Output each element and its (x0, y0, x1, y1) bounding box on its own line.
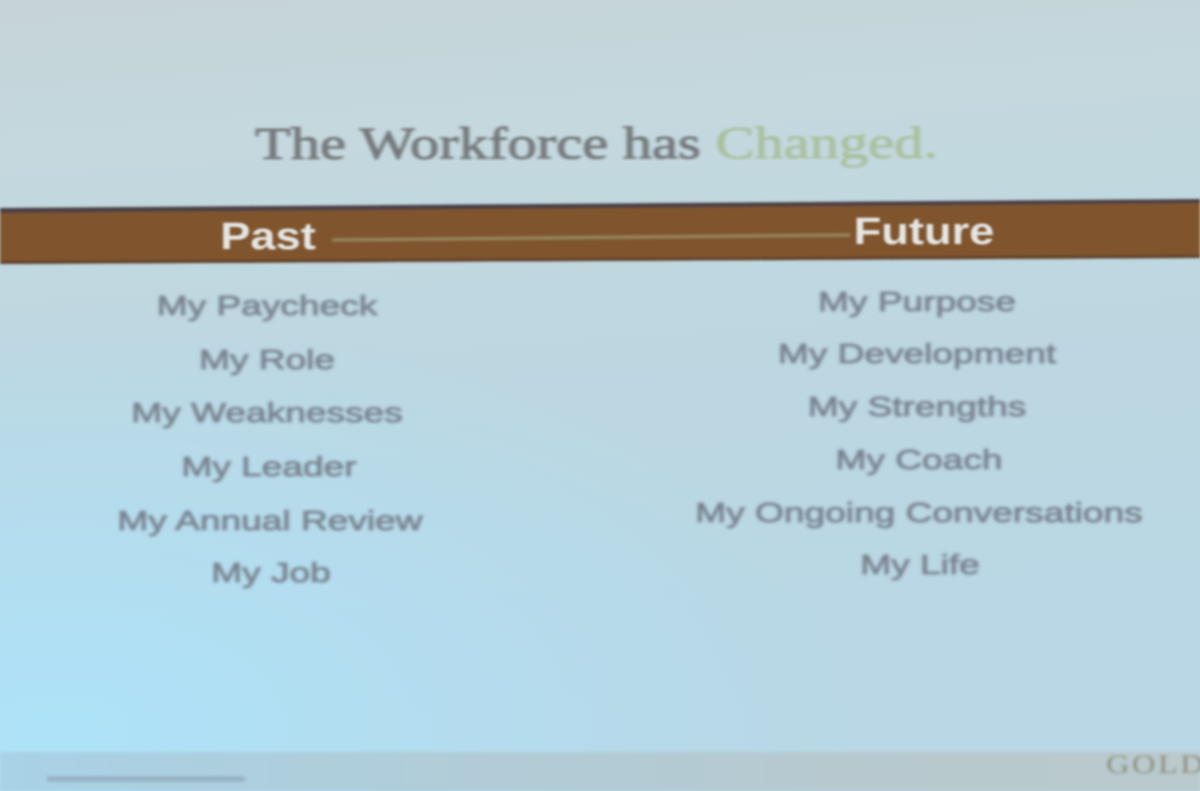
past column list: My Leader (181, 451, 357, 482)
future column list: My Development (778, 338, 1056, 369)
past column list: My Job (211, 557, 331, 588)
title: The Workforce has Changed. (255, 118, 938, 169)
future column list: My Purpose (818, 286, 1016, 317)
future column list: My Coach (835, 444, 1003, 475)
footer bar (0, 752, 1200, 791)
past column list: My Annual Review (117, 505, 423, 536)
future column list: My Life (860, 549, 980, 580)
past column list: My Weaknesses (131, 397, 403, 428)
footer small text (47, 777, 245, 781)
heading: Past: Past (220, 216, 316, 258)
past column list: My Role (199, 344, 335, 375)
heading: Future: Future (854, 211, 994, 253)
past column list (117, 290, 425, 590)
past column list: My Paycheck (157, 290, 377, 321)
future column list: My Strengths (808, 391, 1026, 422)
future column list (695, 286, 1144, 582)
future column list: My Ongoing Conversations (695, 497, 1143, 528)
